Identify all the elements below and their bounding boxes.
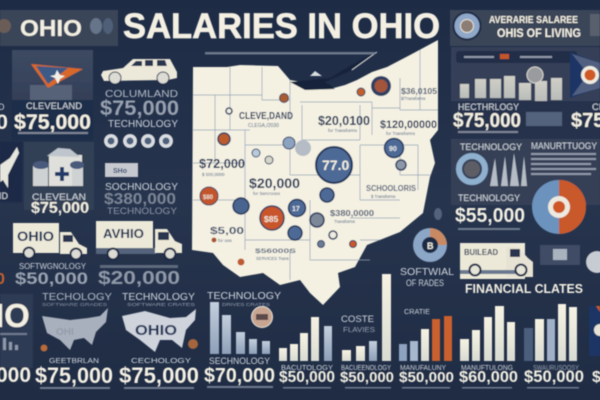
panel: top-left Ohio banner: [0, 10, 118, 46]
panel: Columland vehicle stat: [100, 59, 179, 148]
heading: financial clates: FINANCIAL CLATES: [465, 281, 583, 296]
chart: bacutology bars: BACUTOLOGY: [281, 363, 333, 372]
callouts: for Transforms: [386, 131, 416, 136]
map markers: $85: [264, 214, 278, 224]
icon: coin badge: [454, 12, 480, 40]
panel: US map card right: SOFTWARE CRATES: [127, 302, 195, 307]
panel: Cleveland flag card: $75,000: [14, 110, 91, 134]
text: software grades: OF RADES: [406, 278, 444, 288]
icon: truck Avhio: [96, 221, 182, 260]
heading: Ohio: OHIO: [20, 15, 82, 41]
panel: US map card left: SOFTWARE GRADES: [42, 302, 107, 307]
panel: Sochnology stat: $380,000: [104, 191, 176, 208]
map markers: 17: [292, 206, 300, 213]
chart: cost flavies bars: BACUEENOLOGY: [341, 365, 391, 372]
icon: truck Avhio: AVHIO: [103, 226, 144, 241]
text: truck stats: SOFTWGNOLOGY: [19, 262, 87, 271]
panel: technology $55,000: [455, 193, 525, 230]
callouts: $20,000: [249, 175, 300, 191]
icon: gears: [540, 245, 600, 273]
chart: technology bars: DRIVES CRATES: [222, 302, 270, 307]
callouts: $120,00000: [380, 119, 437, 131]
chart: cost flavies bars: $50,000: [340, 369, 394, 386]
chart: manufacturing orange bars: MANUFALUNY: [400, 365, 446, 372]
callouts: $380,0000: [330, 208, 374, 218]
panel: Cleveland flag card: [12, 50, 93, 140]
callouts: Transforms: [334, 219, 355, 224]
callouts: [199, 87, 438, 261]
panel: Sochnology stat: [104, 163, 178, 216]
chart: manufacturing cream bars: MANUFTULONG: [461, 365, 513, 372]
chart: right cream bars: SWAURUSOOSY: [533, 365, 579, 372]
panel: US map card left: OHI: [56, 327, 74, 338]
panel: Sochnology stat: TECHNOLOGY: [107, 206, 177, 216]
text: truck stats: $50,000: [15, 269, 88, 288]
panel: US map card left: TECHOLOGY: [42, 291, 112, 303]
callouts: $20,0100: [318, 113, 370, 128]
callouts: $ 500,0000: [202, 172, 225, 177]
icon: software wheel: B: [427, 241, 434, 251]
chart: cost flavies bars: FLAVIES: [343, 325, 375, 334]
chart: technology bars: $70,000: [204, 365, 275, 387]
panel: average salaries header: [450, 10, 600, 46]
panel: large OHIO fragment: [0, 294, 33, 387]
panel: Cleveland hospital card: CLEVELAN: [32, 192, 86, 203]
panel: US map card right: TECHNOLOGY: [122, 291, 195, 303]
callouts: $5,00: [210, 226, 245, 237]
panel: US map card right: $75,000: [119, 363, 199, 388]
chart: bacutology bars: $50,000: [279, 369, 335, 386]
icon: truck Ohio: OHIO: [17, 228, 54, 244]
callouts: for Transforms: [328, 128, 358, 133]
panel: US map card right: OHIO: [135, 322, 177, 339]
chart: technology bars: SECHNOLOGY: [209, 356, 270, 366]
icon: Ohio flag: [570, 52, 600, 98]
icon: hospital building: [33, 148, 84, 186]
callouts: $/Transforms: [401, 96, 426, 101]
panel: technology pie and spires: TECHNOLOGY: [460, 142, 523, 153]
panel: technology pie and spires: [451, 140, 600, 205]
chart: cost flavies bars: [340, 274, 394, 388]
icon: delivery truck: BUILEAD: [464, 248, 498, 257]
callouts: CLEGA,/2030: [248, 123, 279, 129]
panel: Columland vehicle stat: $75,000: [100, 96, 179, 120]
panel: Sochnology stat: SOCHNOLOGY: [105, 182, 178, 193]
panel: average salaries header: AVERARIE SALAREE: [489, 15, 578, 26]
chart: technology bars: [204, 290, 281, 388]
panel: Columland vehicle stat: COLUMLAND: [105, 88, 178, 100]
text: software grades: [400, 267, 454, 288]
chart: manufacturing orange bars: $50,000: [399, 369, 454, 386]
callouts: $36,0105: [401, 87, 438, 96]
subtitle line: [205, 52, 375, 54]
icon: Ohio pennant: [30, 64, 83, 100]
map markers: [200, 76, 406, 266]
icon: SUV: [101, 59, 177, 84]
panel: Cleveland hospital card: $75,000: [31, 200, 89, 217]
callouts: for oos: [218, 238, 233, 243]
panel: Cleveland flag card: CLEVELAND: [26, 101, 82, 112]
chart: manufacturing orange bars: CRATIE: [404, 307, 430, 316]
callouts: SERVICES Trans: [256, 256, 289, 261]
icon: delivery truck: [460, 243, 533, 279]
bars: [460, 76, 562, 102]
panel: Cleveland hospital card: [24, 142, 94, 217]
callouts: $56000S: [255, 248, 297, 255]
panel: US map card left: $75,000: [35, 363, 113, 388]
panel: bar chart with flag: $75,000: [453, 110, 521, 132]
panel: technology $55,000: $55,000: [455, 205, 525, 227]
panel: bar chart with flag: HECTHRLOGY: [458, 102, 520, 113]
chart: right cream bars: [524, 304, 584, 388]
panel: US map card right: [119, 291, 199, 389]
panel: US map card right: CECHOLOGY: [131, 356, 191, 365]
chart: manufacturing cream bars: [459, 306, 518, 388]
chart: manufacturing orange bars: [399, 307, 454, 388]
text: truck stats: [0, 262, 180, 288]
callouts: SCHOOLORIS: [366, 183, 416, 193]
chart: manufacturing cream bars: $60,000: [459, 369, 518, 386]
heading: salaries in Ohio: SALARIES IN OHIO: [123, 7, 440, 46]
callouts: $72,000: [199, 157, 245, 171]
panel: bar chart with flag: [451, 47, 600, 140]
chart: donut: [532, 180, 586, 234]
icon: badges: [90, 18, 113, 34]
panel: US map card left: [35, 291, 113, 389]
county lines: [193, 50, 438, 280]
panel: Columland vehicle stat: TECHNOLOGY: [108, 119, 178, 130]
icon: corner flag: [589, 306, 600, 386]
chart: bacutology bars: [279, 317, 335, 388]
icon: coin medallion: [252, 306, 272, 328]
panel: Sochnology stat: SHo: [113, 168, 127, 175]
callouts: $ Transforms: [371, 194, 395, 199]
chart: cost flavies bars: COSTE: [341, 314, 374, 325]
map markers: 77.0: [322, 157, 349, 173]
map markers: $80: [203, 195, 214, 201]
panel: average salaries header: OHIS OF LIVING: [497, 28, 581, 40]
icon: software wheel: [413, 208, 447, 262]
panel: technology $55,000: TECHNOLOGY: [458, 193, 521, 204]
chart: technology bars: TECHNOLOGY: [207, 290, 281, 302]
chart: right cream bars: $50,000: [524, 368, 584, 386]
map: Ohio: [192, 40, 438, 305]
icon: airplane and lake notch: [290, 52, 377, 90]
icon row: four badges: [104, 134, 173, 148]
panel: US map fragment: [0, 142, 22, 202]
callouts: for Sercrooes: [253, 191, 281, 196]
panel: US map card left: GEETBRLAN: [49, 356, 99, 365]
callouts: CLEVE,DAND: [239, 110, 293, 122]
text: truck stats: $20,000: [98, 268, 180, 288]
map markers: 90: [389, 146, 397, 153]
text: software grades: SOFTWIAL: [400, 267, 454, 278]
icon: truck Ohio: [13, 223, 87, 260]
